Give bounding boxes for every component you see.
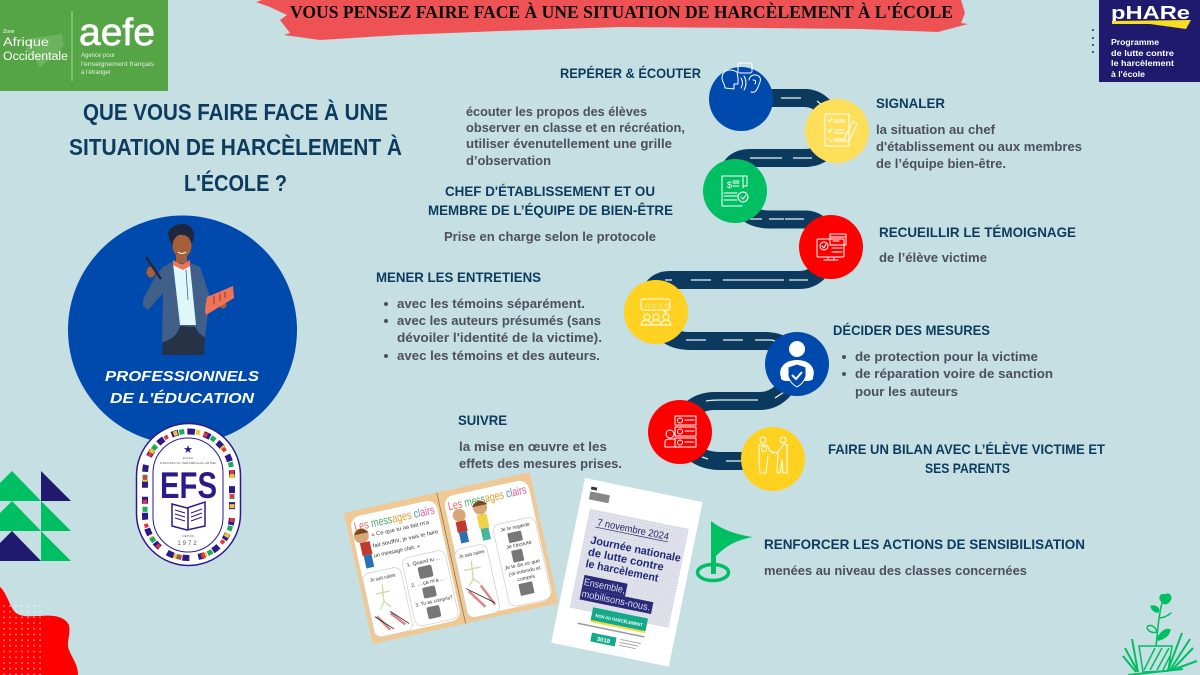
banner title (256, 0, 968, 40)
logo: EFS badge: FRANCO-SÉNÉGALAISE (160, 460, 216, 465)
logo: aefe Afrique Occidentale: aefe (79, 12, 155, 54)
step text: renforcer les actions (764, 536, 1085, 578)
logo: EFS badge: EFS (160, 465, 217, 506)
step text: décider des mesures: pour les auteurs (855, 385, 958, 399)
panel: professionnels de l'éducation: DE L'ÉDUCATION (110, 390, 255, 407)
image: affiche journée nationale: Ensemble, (583, 577, 626, 596)
step text: chef d'établissement: MEMBRE DE L’ÉQUIPE DE BIEN-ÊTRE (428, 201, 673, 218)
step text: décider des mesures (833, 322, 1053, 399)
step text: suivre (458, 412, 622, 471)
main heading: SITUATION DE HARCÈLEMENT À (69, 133, 402, 160)
step text: mener les entretiens: dévoiler l'identité de la victime). (397, 331, 602, 345)
logo: aefe Afrique Occidentale: Zone (3, 29, 15, 35)
step 2 icon: signaler (805, 99, 869, 163)
step text: mener les entretiens: avec les témoins et des auteurs. (397, 349, 600, 363)
step text: mener les entretiens: avec les témoins séparément. (397, 297, 585, 311)
step text: recueillir le témoignage: de l’élève victime (879, 251, 987, 265)
step text: décider des mesures: DÉCIDER DES MESURES (833, 322, 990, 338)
image: carte les messages clairs: 2. ....ça m'a ... (411, 576, 445, 589)
step text: signaler: la situation au chef (876, 123, 996, 137)
panel: professionnels de l'éducation: PROFESSIONNELS (105, 368, 259, 385)
image: affiche journée nationale (551, 478, 703, 667)
image: affiche journée nationale: 7 novembre 2024 (596, 517, 670, 543)
image: affiche journée nationale: de lutte contre (587, 546, 665, 574)
step text: chef d'établissement (428, 183, 673, 244)
main heading: QUE VOUS FAIRE FACE À UNE (83, 98, 388, 125)
logo: aefe Afrique Occidentale: l'enseignement français (81, 62, 154, 68)
step text: chef d'établissement: CHEF D'ÉTABLISSEMENT ET OU (445, 183, 655, 199)
image: carte les messages clairs: Je te dis ce que (504, 558, 541, 572)
step text: repérer & écouter (466, 65, 701, 168)
main heading (69, 98, 402, 196)
step text: repérer & écouter: d’observation (466, 154, 551, 168)
main heading: L'ÉCOLE ? (184, 169, 287, 196)
image: carte les messages clairs: Je suis calme (370, 572, 396, 584)
logo: EFS badge: 1972 (177, 541, 199, 547)
step 1 icon: écoute (709, 63, 773, 131)
image: carte les messages clairs: Les messages clairs (353, 503, 436, 534)
decoration: triangles (0, 471, 71, 561)
step text: signaler: SIGNALER (876, 95, 945, 111)
step text: recueillir le témoignage (879, 224, 1076, 265)
step text: repérer & écouter: observer en classe et en récréation, (466, 121, 685, 135)
step text: renforcer les actions: RENFORCER LES ACTIONS DE SENSIBILISATION (764, 536, 1085, 552)
banner title: VOUS PENSEZ FAIRE FACE À UNE SITUATION DE HARCÈLEMENT À L'ÉCOLE (290, 1, 953, 22)
logo: pHARe: à l'école (1111, 70, 1146, 79)
step text: faire un bilan (828, 441, 1105, 476)
road (651, 98, 837, 461)
step 7 icon: suivre (648, 400, 712, 464)
logo: pHARe: le harcèlement (1111, 59, 1174, 68)
step text: faire un bilan: SES PARENTS (925, 460, 1010, 476)
step 5 icon: entretiens (624, 280, 688, 344)
image: carte les messages clairs: fait souffrir, je vais te faire (372, 529, 439, 550)
step text: signaler: d'établissement ou aux membres (876, 140, 1082, 154)
logo: pHARe: Programme (1111, 38, 1160, 47)
decoration: green plant (1123, 594, 1197, 675)
logo: pHARe: de lutte contre (1111, 49, 1175, 58)
image: affiche journée nationale: NON AU HARCÈLEMENT (595, 611, 644, 628)
image: carte les messages clairs: « Ce que tu as fait m'a (371, 520, 431, 539)
decoration: red blob (0, 587, 78, 675)
logo: pHARe (1099, 0, 1200, 82)
logo: aefe Afrique Occidentale (0, 0, 168, 91)
image: affiche journée nationale: le harcèlement (585, 558, 660, 585)
logo: EFS badge: ÉCOLE (183, 455, 193, 460)
step 6 icon: mesures (765, 332, 829, 396)
logo: aefe Afrique Occidentale: Agence pour (81, 53, 115, 59)
image: carte les messages clairs: un message clair. » (373, 544, 421, 559)
image: carte les messages clairs: compris (517, 573, 536, 583)
step 5 icon: entretiens: ☆☆☆☆ (644, 301, 671, 310)
image: carte les messages clairs: 1. Quand tu ... (406, 556, 441, 569)
panel: professionnels de l'éducation (68, 216, 297, 444)
step text: renforcer les actions: menées au niveau des classes concernées (764, 564, 1027, 578)
step text: décider des mesures: de protection pour la victime (855, 350, 1038, 364)
step 3 icon: chef d'établissement: $ (727, 180, 732, 190)
image: carte les messages clairs: Les messages clairs (447, 482, 528, 513)
logo: pHARe: pHARe (1111, 3, 1190, 23)
step text: repérer & écouter: utiliser évenutellement une grille (466, 137, 672, 151)
logo: aefe Afrique Occidentale: Occidentale (3, 51, 68, 63)
image: carte les messages clairs: j'ai entendu et (508, 565, 542, 578)
step text: chef d'établissement: Prise en charge selon le protocole (444, 230, 656, 244)
step text: mener les entretiens: MENER LES ENTRETIENS (376, 269, 541, 285)
logo: aefe Afrique Occidentale: Afrique (3, 37, 49, 49)
logo: aefe Afrique Occidentale: à l'étranger (81, 70, 111, 76)
step text: suivre: effets des mesures prises. (459, 457, 622, 471)
step text: mener les entretiens (376, 269, 602, 363)
step text: suivre: la mise en œuvre et les (459, 440, 607, 454)
image: affiche journée nationale: 3018 (596, 637, 611, 645)
image: affiche journée nationale: mobilisons-nous. (580, 589, 651, 614)
step text: suivre: SUIVRE (458, 412, 507, 428)
step text: signaler: de l’équipe bien-être. (876, 157, 1006, 171)
step text: recueillir le témoignage: RECUEILLIR LE TÉMOIGNAGE (879, 224, 1076, 240)
image: carte les messages clairs: Je t'écoute (506, 539, 533, 551)
step text: repérer & écouter: écouter les propos des élèves (466, 105, 647, 119)
image: carte les messages clairs: Je te regarde (500, 521, 531, 534)
step text: décider des mesures: de réparation voire de sanction (855, 367, 1053, 381)
logo: EFS badge: ★ (183, 444, 193, 456)
logo: EFS badge: DEPUIS (182, 534, 194, 538)
image: carte les messages clairs: 3. Tu as compris? (415, 595, 454, 609)
children figures (352, 499, 495, 570)
step text: repérer & écouter: REPÉRER & ÉCOUTER (560, 65, 701, 81)
logo: EFS badge (136, 424, 240, 566)
step text: faire un bilan: FAIRE UN BILAN AVEC L’ÉLÈVE VICTIME ET (828, 441, 1105, 457)
step text: mener les entretiens: avec les auteurs présumés (sans (397, 314, 601, 328)
image: carte les messages clairs (344, 472, 558, 644)
step 4 icon: témoignage (799, 215, 863, 279)
step text: signaler (876, 95, 1082, 171)
icon: teacher illustration (143, 224, 234, 355)
image: affiche journée nationale: Journée nationale (589, 535, 682, 565)
step 3 icon: chef d'établissement (703, 159, 767, 223)
icon: green flag (698, 521, 753, 580)
step 8 icon: bilan (741, 427, 805, 491)
image: carte les messages clairs: Je suis calme (459, 549, 485, 560)
